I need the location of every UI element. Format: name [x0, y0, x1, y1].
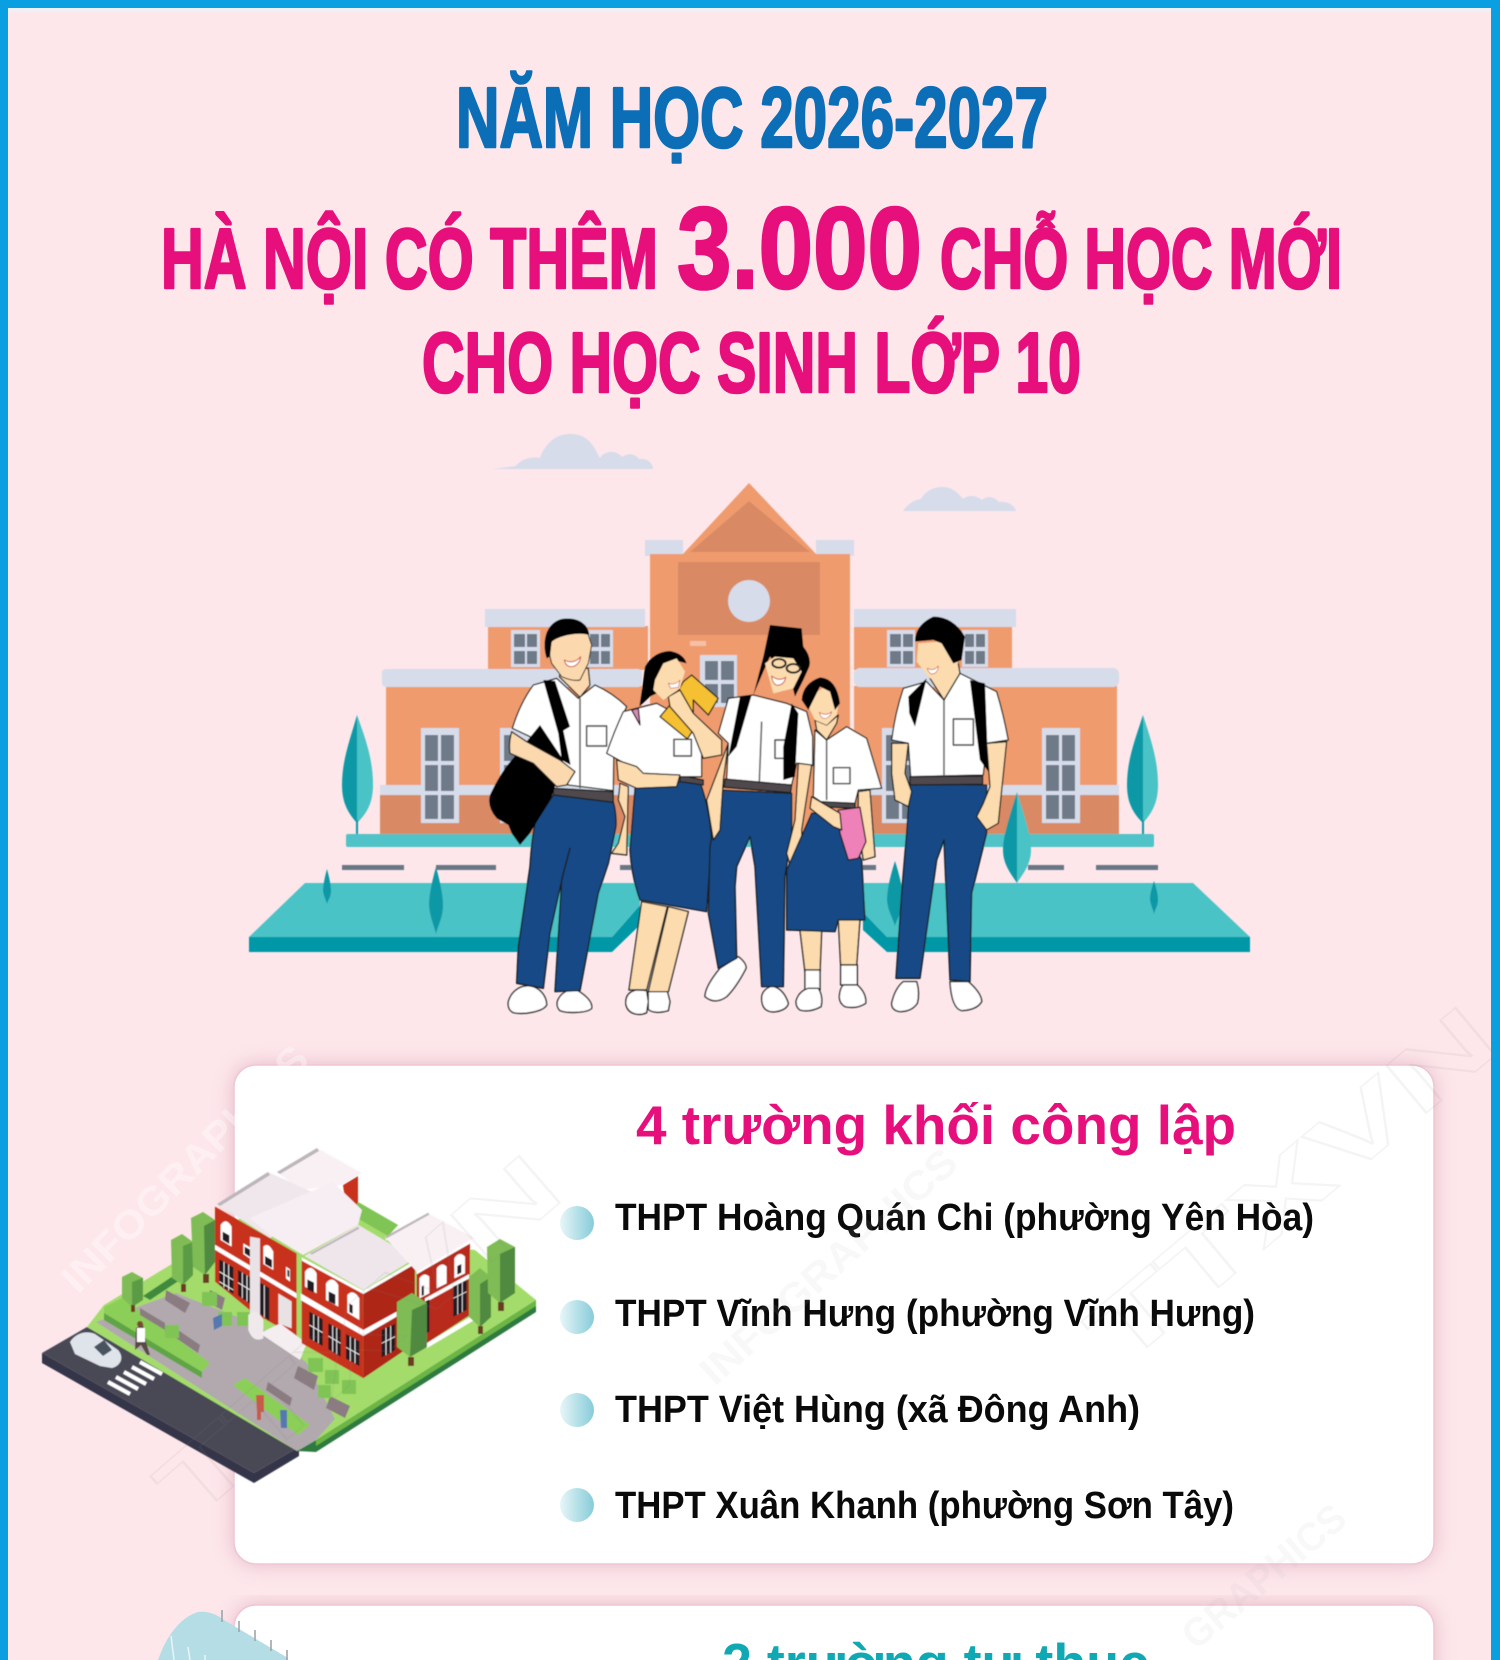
panel: private schools card	[234, 1605, 1434, 1660]
student: tall girl with glasses	[705, 625, 813, 1012]
icon: isometric school	[42, 1148, 536, 1483]
list: public schools	[560, 1197, 1314, 1527]
bullet 3	[560, 1393, 594, 1427]
bullet 1	[560, 1206, 594, 1240]
watermark	[53, 987, 1500, 1658]
car	[70, 1332, 121, 1368]
watermark: INFOGRAPHICS	[692, 1140, 966, 1394]
illustration: school building with students	[249, 434, 1250, 1014]
watermark: TTXVN	[138, 1136, 580, 1539]
watermark: TTXVN	[1069, 987, 1500, 1385]
item 3: THPT Việt Hùng (xã Đông Anh)	[615, 1389, 1140, 1431]
item 4: THPT Xuân Khanh (phường Sơn Tây)	[615, 1485, 1234, 1527]
student: small girl with pink book	[787, 677, 882, 1011]
hedges	[104, 1274, 310, 1435]
clouds	[492, 434, 1016, 511]
right back block	[385, 1213, 475, 1348]
title	[161, 71, 1342, 411]
title line: headline with number: HÀ NỘI CÓ THÊM	[161, 211, 658, 307]
road	[42, 1327, 299, 1483]
title line: headline with number	[161, 183, 1342, 313]
trees	[323, 715, 1158, 934]
heading: public schools: 4 trường khối công lập	[636, 1094, 1236, 1156]
ground and lawns	[249, 834, 1250, 952]
title line: headline with number: 3.000	[677, 183, 922, 313]
benches	[140, 1290, 350, 1418]
lawn base	[297, 1300, 536, 1452]
main wall left	[213, 1207, 307, 1360]
main roofs	[217, 1172, 362, 1255]
windows	[421, 630, 1080, 823]
bullet 4	[560, 1488, 594, 1522]
students	[489, 617, 1008, 1014]
item 1: THPT Hoàng Quán Chi (phường Yên Hòa)	[615, 1197, 1314, 1239]
shrubs	[165, 1292, 356, 1398]
walkway	[96, 1293, 335, 1451]
icon: blue school building (cropped)	[158, 1610, 288, 1660]
building	[380, 483, 1119, 836]
student: girl with yellow book	[607, 651, 722, 1014]
right front block	[301, 1225, 415, 1378]
watermark: INFOGRAPHICS	[53, 1037, 318, 1301]
item 2: THPT Vĩnh Hưng (phường Vĩnh Hưng)	[615, 1293, 1255, 1335]
student: boy with shoulder bag	[489, 619, 627, 1013]
title line: grade 10: CHO HỌC SINH LỚP 10	[422, 316, 1081, 411]
panel: public schools card	[234, 1065, 1434, 1564]
student: boy with backpack	[892, 617, 1008, 1012]
bullet 2	[560, 1300, 594, 1334]
watermark: GRAPHICS	[1174, 1496, 1355, 1658]
pedestrians	[135, 1314, 287, 1428]
title line: school year: NĂM HỌC 2026-2027	[456, 71, 1048, 166]
cuboid trees	[122, 1212, 515, 1366]
back wing	[277, 1148, 398, 1236]
